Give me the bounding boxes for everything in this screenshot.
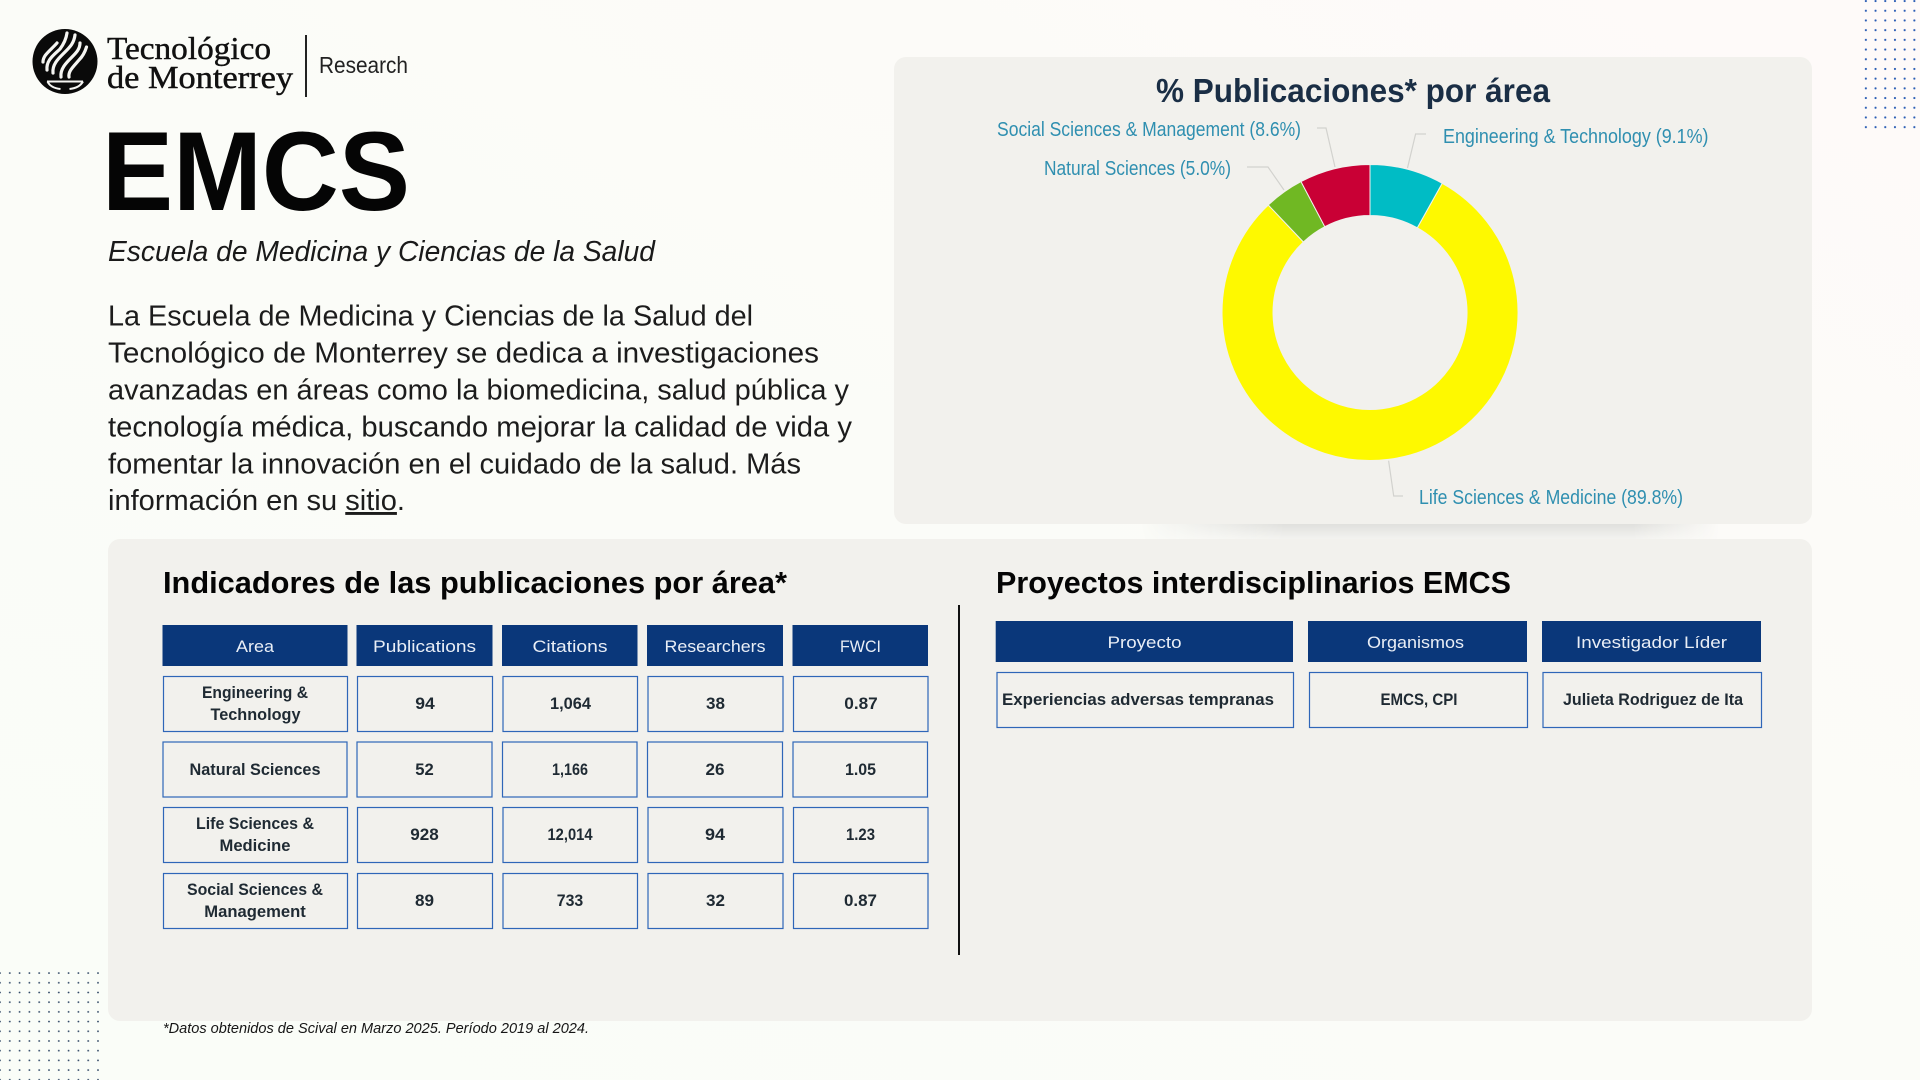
projects header: Investigador Líder	[1576, 633, 1727, 652]
label: social sciences	[997, 119, 1335, 167]
icon: torch flame emblem	[32, 29, 98, 94]
row: social sciences: Social Sciences &	[187, 881, 323, 899]
panel: publications donut chart	[894, 57, 1812, 524]
logo wordmark: Tecnológico	[107, 30, 271, 66]
logo: Research: Research	[319, 52, 408, 78]
label: social sciences: Social Sciences & Management (8.6%)	[997, 119, 1301, 141]
row: engineering: Engineering &	[202, 684, 308, 702]
text block: description: avanzadas en áreas como la biomedicina, salud pública y	[108, 374, 849, 406]
label: engineering: Engineering & Technology (9.1%)	[1443, 126, 1708, 148]
row: natural sciences: 1.05	[845, 761, 876, 779]
label: life sciences	[1389, 461, 1683, 509]
chart heading: % Publicaciones* por área	[1156, 72, 1551, 109]
label: natural sciences: Natural Sciences (5.0%)	[1044, 158, 1231, 180]
row: social sciences: 0.87	[844, 892, 877, 910]
row: engineering: 0.87	[844, 695, 878, 713]
row: natural sciences	[163, 742, 928, 797]
table header: Publications	[373, 637, 476, 656]
row: life sciences: 12,014	[548, 826, 593, 844]
text block: description	[108, 300, 853, 517]
projects row: Julieta Rodriguez de Ita	[1563, 691, 1744, 709]
projects row: Experiencias adversas tempranas	[1002, 691, 1274, 709]
title: EMCS: EMCS	[102, 109, 410, 234]
row: life sciences: Medicine	[220, 837, 290, 855]
table header	[162, 625, 928, 666]
row: natural sciences: 26	[706, 761, 724, 779]
logo: Tecnologico de Monterrey Research	[32, 29, 408, 97]
text block: description: información en su sitio.	[108, 485, 405, 517]
row: life sciences: 1.23	[846, 826, 875, 844]
table: indicators	[162, 625, 928, 928]
label: engineering	[1408, 126, 1708, 168]
row: social sciences: 733	[557, 892, 583, 910]
row: life sciences: 928	[410, 826, 439, 844]
row: natural sciences: 52	[415, 761, 434, 779]
logo wordmark	[107, 30, 293, 95]
row: life sciences: 94	[705, 826, 726, 844]
row: social sciences: 32	[706, 892, 725, 910]
row: life sciences	[164, 808, 928, 862]
row: natural sciences: Natural Sciences	[190, 761, 320, 779]
text block: description: tecnología médica, buscando mejorar la calidad de vida y	[108, 412, 853, 444]
table header: Citations	[532, 637, 608, 656]
row: social sciences: Management	[204, 903, 306, 921]
row: social sciences: 89	[415, 892, 434, 910]
table header: Area	[236, 637, 275, 656]
label: natural sciences	[1044, 158, 1284, 190]
row: engineering: 38	[706, 695, 725, 713]
logo wordmark: de Monterrey	[107, 59, 293, 95]
footnote: *Datos obtenidos de Scival en Marzo 2025. Período 2019 al 2024.	[163, 1020, 589, 1037]
text block: description: fomentar la innovación en el cuidado de la salud. Más	[108, 448, 801, 480]
projects header: Organismos	[1367, 633, 1464, 652]
projects header	[996, 621, 1761, 662]
projects row	[997, 672, 1762, 728]
panel: indicators and projects	[108, 539, 1812, 1021]
row: natural sciences: 1,166	[552, 761, 588, 779]
text block: description: Tecnológico de Monterrey se dedica a investigaciones	[108, 338, 819, 370]
donut chart	[1222, 164, 1518, 461]
projects header: Proyecto	[1108, 633, 1182, 652]
row: social sciences	[164, 874, 928, 928]
heading: projects: Proyectos interdisciplinarios EMCS	[996, 565, 1511, 600]
row: engineering: 1,064	[550, 695, 592, 713]
text block: description: La Escuela de Medicina y Ciencias de la Salud del	[108, 300, 753, 332]
row: engineering: 94	[415, 695, 436, 713]
subtitle: Escuela de Medicina y Ciencias de la Salud	[108, 236, 656, 268]
projects row: EMCS, CPI	[1380, 691, 1458, 709]
row: engineering	[164, 676, 928, 732]
row: life sciences: Life Sciences &	[196, 815, 314, 833]
label: life sciences: Life Sciences & Medicine (89.8%)	[1419, 487, 1683, 509]
row: engineering: Technology	[210, 706, 301, 724]
heading: indicators: Indicadores de las publicaciones por área*	[163, 565, 788, 600]
table header: Researchers	[664, 637, 766, 656]
table: projects	[996, 621, 1762, 728]
table header: FWCI	[840, 637, 881, 656]
